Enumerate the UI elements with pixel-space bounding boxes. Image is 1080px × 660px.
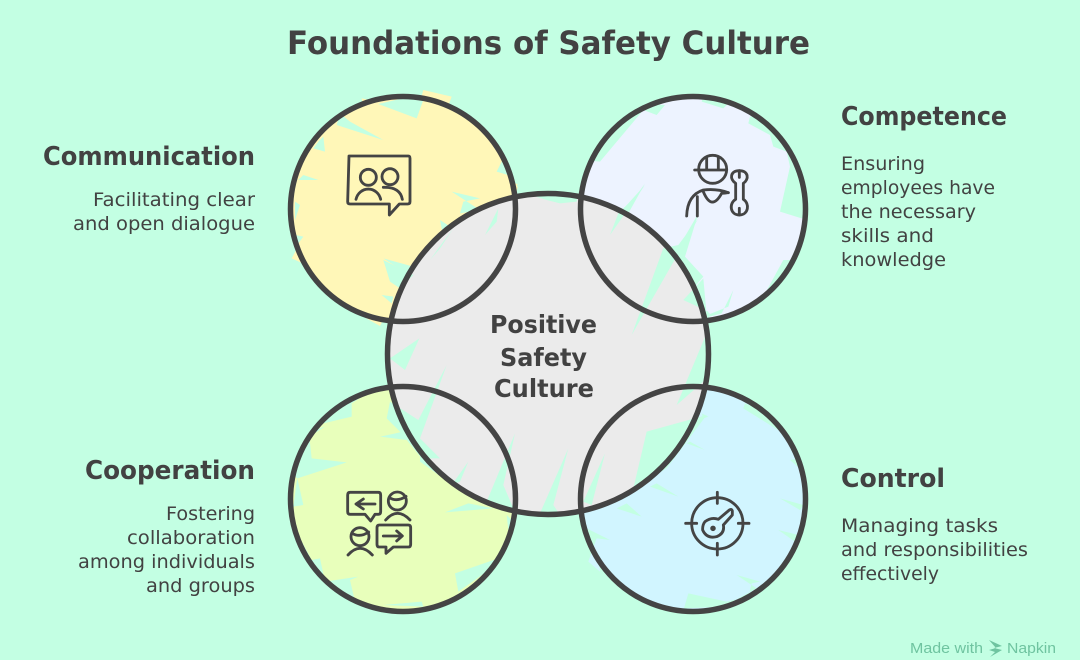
icon: key in target: [686, 492, 749, 555]
text block: cooperation: Fostering: [166, 503, 255, 525]
text block: competence: skills and: [841, 225, 934, 247]
ring: communication: [290, 96, 516, 322]
ring: cooperation: [290, 386, 516, 612]
ring: competence: [580, 96, 806, 322]
hachure gaps in central circle: [383, 185, 710, 515]
text block: control: and responsibilities: [841, 539, 1028, 561]
fill: competence circle: [577, 97, 807, 330]
text block: control: Managing tasks: [841, 515, 998, 537]
text block: competence: Ensuring: [841, 153, 925, 175]
center label: Positive: [490, 310, 597, 339]
ring: central: [388, 194, 708, 514]
text block: cooperation: collaboration: [127, 527, 255, 549]
text block: communication: and open dialogue: [73, 213, 255, 235]
center label: Safety: [500, 343, 587, 372]
text block: competence: knowledge: [841, 249, 946, 271]
ring: control: [580, 386, 806, 612]
text block: competence: Competence: [841, 102, 1007, 132]
footer: made with napkin: Napkin: [1007, 641, 1056, 657]
icon: worker with wrench: [687, 155, 747, 216]
text block: cooperation: and groups: [146, 575, 255, 597]
fill: control circle: [581, 387, 805, 611]
footer: made with napkin: Made with: [910, 641, 983, 657]
text block: competence: the necessary: [841, 201, 976, 223]
text block: communication: Communication: [43, 142, 255, 172]
center label: [490, 310, 597, 403]
fill: communication circle: [291, 90, 518, 326]
fill: cooperation circle: [291, 385, 515, 611]
icon: two people exchanging messages: [348, 492, 411, 555]
text block: control: [841, 464, 1028, 585]
text block: cooperation: [78, 456, 255, 597]
text block: competence: employees have: [841, 177, 995, 199]
text block: competence: [841, 102, 1007, 271]
text block: cooperation: among individuals: [78, 551, 255, 573]
footer: made with napkin: [910, 640, 1056, 657]
text block: control: effectively: [841, 563, 939, 585]
panel: central circle fill: [383, 185, 710, 515]
text block: control: Control: [841, 464, 945, 494]
title: Foundations of Safety Culture: [287, 24, 810, 62]
text block: communication: [43, 142, 255, 235]
text block: cooperation: Cooperation: [85, 456, 255, 486]
text block: communication: Facilitating clear: [93, 189, 255, 211]
icon: people in speech bubble: [348, 156, 410, 215]
center label: Culture: [494, 374, 594, 403]
